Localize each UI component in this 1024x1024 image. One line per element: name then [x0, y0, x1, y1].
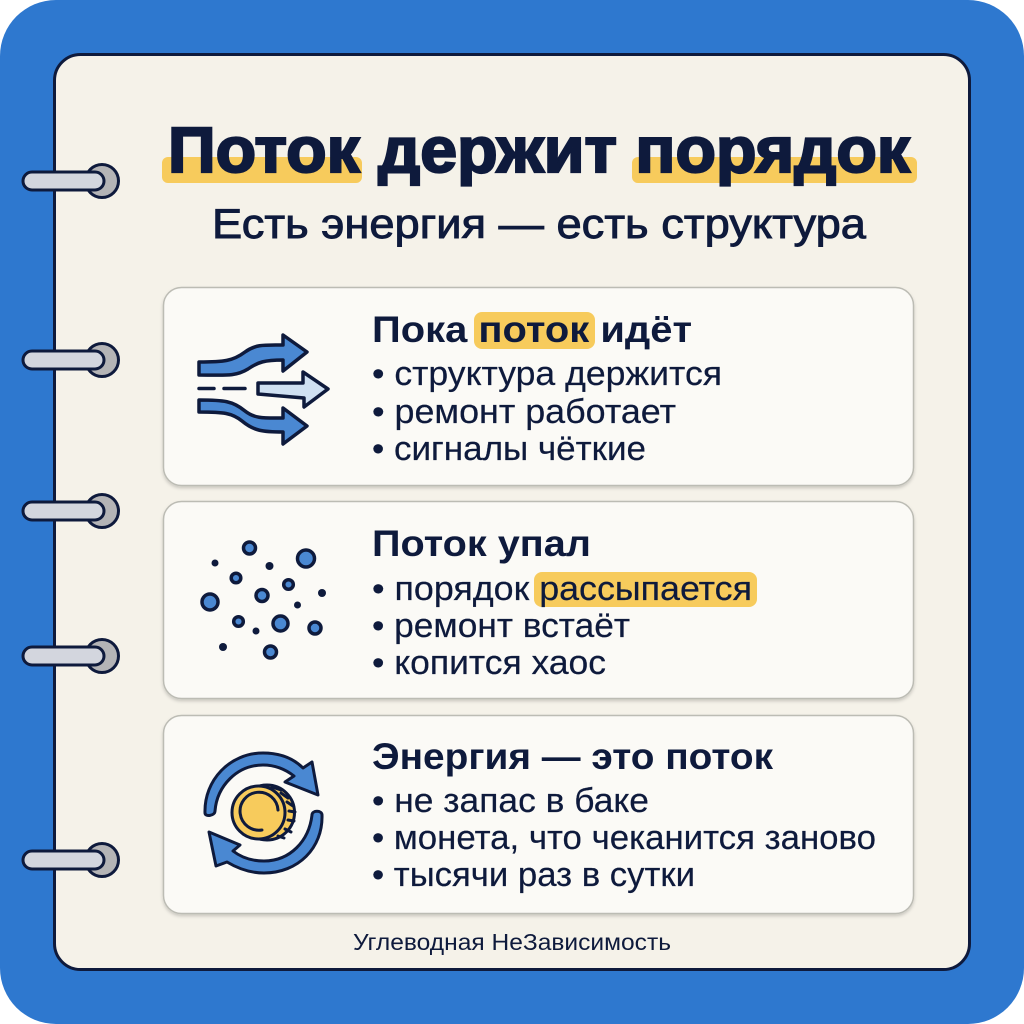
bullet list: • порядок рассыпается: [372, 570, 752, 608]
ring 4: [23, 640, 118, 672]
heading highlight: [474, 312, 595, 349]
ring 1: [23, 164, 118, 198]
highlight: [534, 572, 757, 607]
ring 3: [23, 494, 118, 528]
icon: scattered dots: [202, 542, 326, 658]
heading: Энергия — это поток: [372, 736, 773, 777]
icon: coin with cycle arrows: [205, 753, 322, 873]
bullet list: • ремонт работает: [372, 393, 676, 431]
bullet list: • сигналы чёткие: [372, 430, 646, 468]
bullet list: [372, 355, 722, 468]
bullet list: • монета, что чеканится заново: [372, 819, 876, 857]
heading: Пока поток идёт: [372, 309, 692, 350]
bullet list: [372, 782, 876, 894]
bullet list: • ремонт встаёт: [372, 607, 630, 645]
icon: flow arrows: [199, 335, 328, 444]
title: Поток держит порядок: [168, 114, 911, 186]
panel: flow continues: [164, 288, 914, 486]
bullet list: • не запас в баке: [372, 782, 649, 820]
binder rings: [23, 164, 118, 876]
bullet list: • копится хаос: [372, 644, 606, 682]
bullet list: • структура держится: [372, 355, 722, 393]
ring 2: [23, 344, 118, 376]
notebook page: [54, 54, 970, 970]
ring 5: [23, 844, 118, 876]
footer credit: Углеводная НеЗависимость: [353, 929, 671, 955]
bullet list: • тысячи раз в сутки: [372, 856, 695, 894]
panel: flow dropped: [164, 502, 914, 698]
bullet list: [372, 570, 752, 682]
heading: Поток упал: [372, 523, 591, 564]
panel: energy is flow: [164, 716, 914, 914]
subtitle: Есть энергия — есть структура: [212, 200, 867, 247]
